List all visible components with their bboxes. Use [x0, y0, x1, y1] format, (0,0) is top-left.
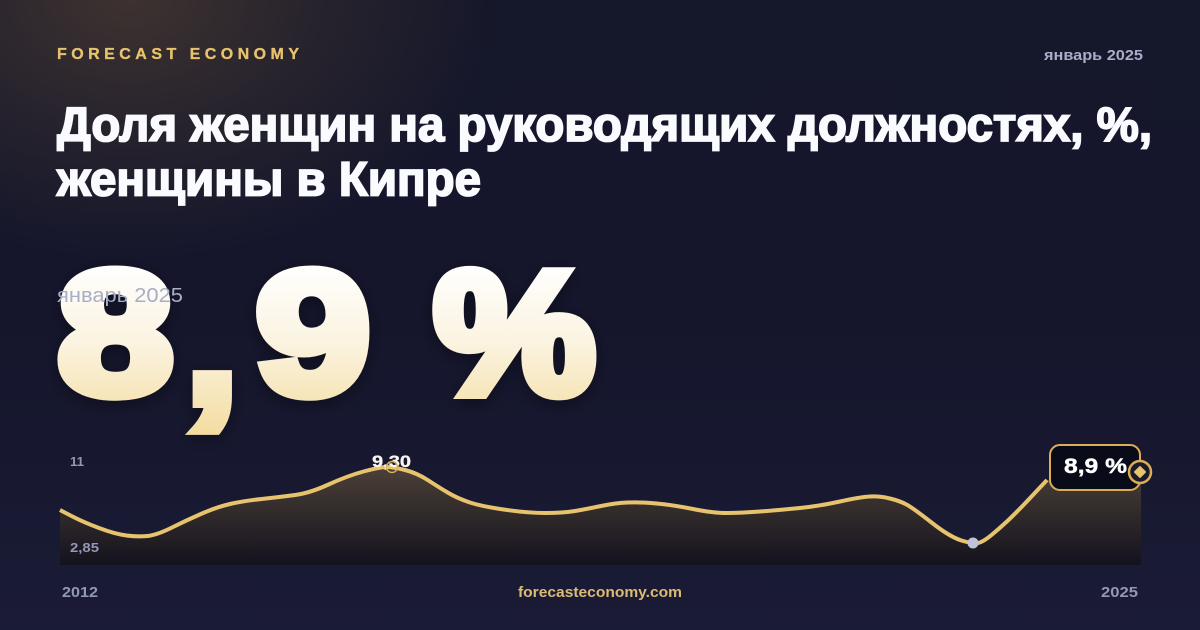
chart line [60, 467, 1047, 543]
brand label: FORECAST ECONOMY [57, 46, 299, 63]
min marker [968, 538, 978, 548]
date top right: январь 2025 [1044, 47, 1143, 64]
title: женщины в Кипре [56, 154, 481, 206]
big value: % [434, 235, 595, 430]
end year: 2025 [1101, 585, 1138, 601]
current value marker [1129, 461, 1151, 483]
axis max label: 11 [70, 454, 84, 469]
title [56, 99, 1152, 206]
max marker [386, 462, 398, 472]
max label: 9,30 [372, 452, 411, 471]
start year: 2012 [62, 585, 98, 601]
big value: 8 [58, 235, 173, 430]
big value [58, 235, 595, 439]
chart area fill [60, 467, 1141, 565]
date under value: январь 2025 [57, 285, 183, 307]
big value: 9 [256, 235, 370, 430]
area chart [60, 445, 1151, 565]
current value callout [1050, 445, 1140, 490]
current value callout: 8,9 % [1064, 455, 1127, 478]
title: Доля женщин на руководящих должностях, %, [57, 99, 1152, 152]
source site: forecasteconomy.com [518, 585, 682, 601]
big value: , [186, 244, 238, 439]
axis min label: 2,85 [70, 540, 99, 555]
